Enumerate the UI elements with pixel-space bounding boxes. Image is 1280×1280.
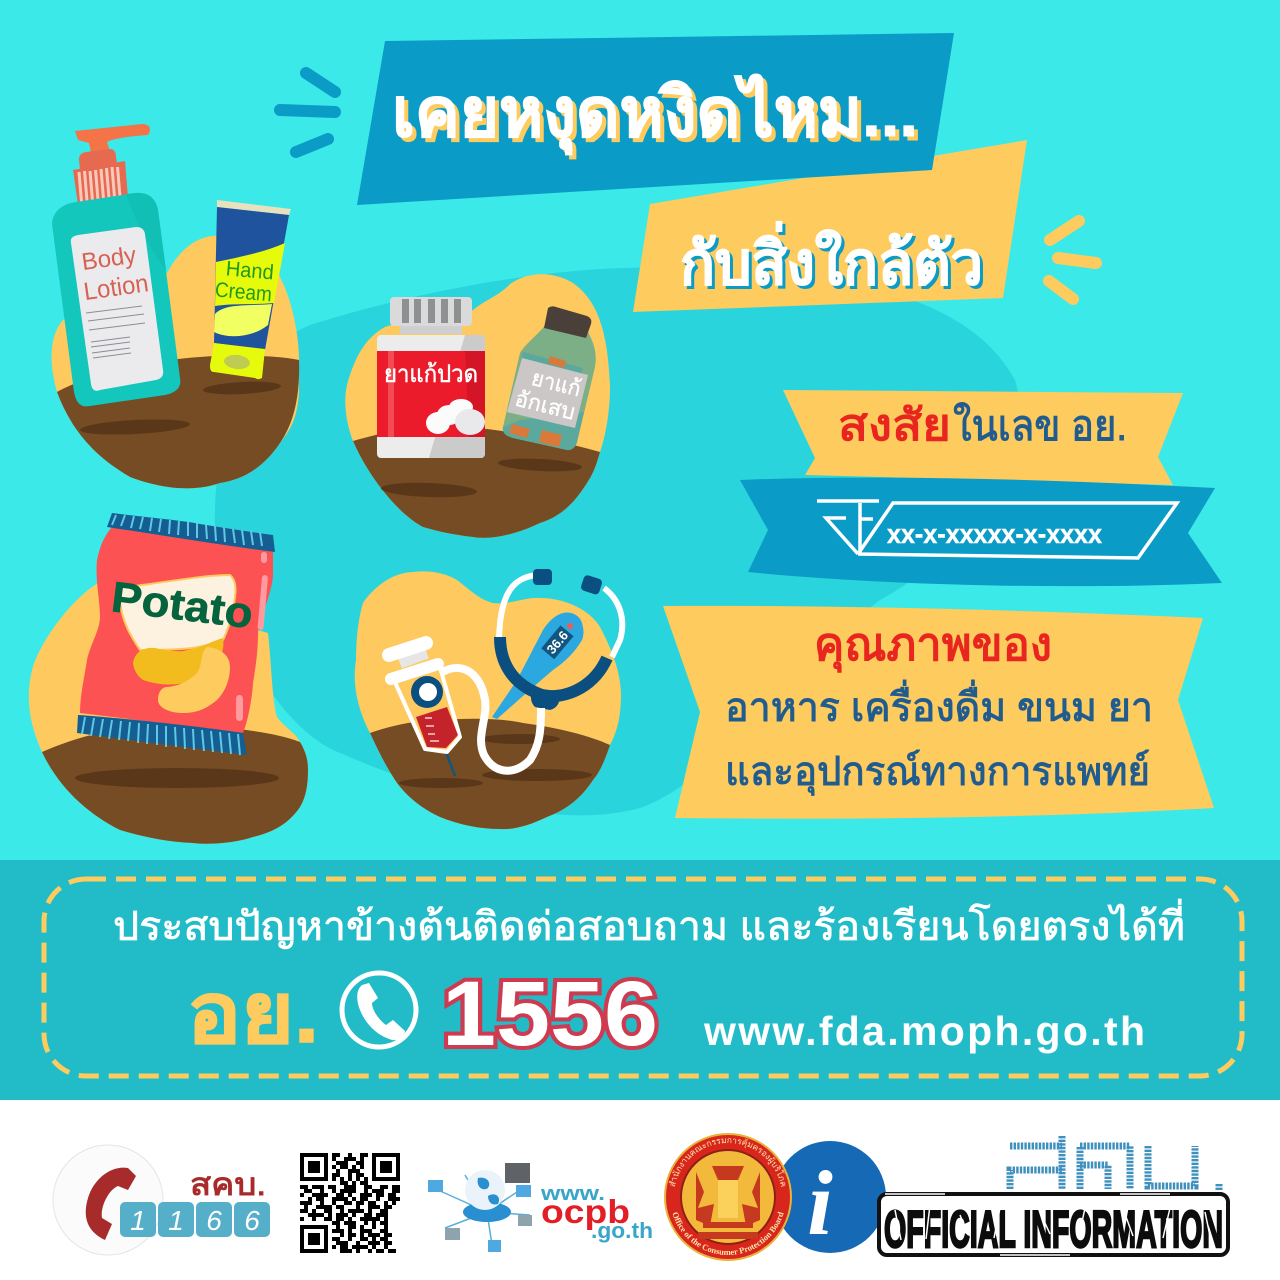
product group: potato chips — [29, 513, 308, 844]
title text: เคยหงุดหงิดไหม... — [396, 77, 922, 159]
logo: Office of the Consumer Protection Board seal — [664, 1133, 792, 1261]
icon: body lotion bottle — [52, 124, 180, 406]
logo: 1166 hotline: 1 — [168, 1205, 184, 1236]
label text: ยาแก้ปวด — [384, 361, 478, 388]
blob — [355, 571, 621, 829]
blob — [51, 235, 299, 488]
QR code — [300, 1153, 400, 1253]
FDA symbol — [817, 501, 1177, 558]
product list line 2: และอุปกรณ์ทางการแพทย์ — [725, 749, 1150, 796]
product group: medicine bottles — [345, 274, 610, 538]
logo: 1166 hotline: 1 — [130, 1205, 146, 1236]
icon: hand cream tube — [210, 200, 291, 379]
seal text: Office of the Consumer Protection Board — [672, 1212, 784, 1255]
label text: Lotion — [82, 269, 150, 306]
quality heading: คุณภาพของ — [814, 618, 1052, 673]
logo: official information stamp — [879, 1136, 1228, 1259]
contact band — [0, 860, 1280, 1100]
logo: ocpb website: .go.th — [591, 1218, 653, 1243]
ribbon: FDA number heading: ในเลข อย. — [953, 402, 1127, 449]
blob — [29, 583, 308, 844]
seal text — [668, 1138, 786, 1255]
label text — [78, 241, 150, 306]
label text: Hand — [225, 257, 275, 284]
ribbon: FDA number heading — [783, 390, 1183, 485]
logo: ocpb website: ocpb — [541, 1193, 630, 1230]
icon: green antibiotic bottle — [503, 306, 596, 450]
ribbon: FDA number format — [740, 478, 1222, 586]
label text — [214, 257, 275, 306]
logo: ocpb website — [428, 1163, 653, 1252]
logo: i information circle — [774, 1141, 886, 1254]
logo: i information circle: i — [807, 1152, 833, 1254]
ribbon: product quality — [663, 606, 1214, 819]
label text: ยาแก้ — [529, 365, 584, 401]
icon: thermometer — [492, 613, 584, 719]
label text — [513, 362, 584, 425]
icon: chips bag — [77, 513, 275, 755]
icon: syringe — [389, 643, 460, 776]
contact sentence: ประสบปัญหาข้างต้นติดต่อสอบถาม และร้องเรียนโดยตรงได้ที่ — [113, 899, 1185, 949]
label text: Cream — [214, 278, 273, 306]
FDA abbreviation: อย. — [187, 966, 319, 1060]
label text: Body — [80, 242, 138, 276]
icon: stethoscope — [438, 569, 622, 771]
text: www. — [540, 1183, 605, 1205]
icon: phone — [342, 973, 416, 1047]
website: www.fda.moph.go.th — [703, 1008, 1145, 1054]
background blob — [215, 268, 1020, 815]
dashed frame — [44, 879, 1242, 1076]
dotted heading — [1010, 1136, 1219, 1190]
subtitle panel — [633, 140, 1027, 312]
seal text: สำนักงานคณะกรรมการคุ้มครองผู้บริโภค — [668, 1138, 786, 1187]
icon: red painkiller bottle — [377, 297, 485, 458]
heading text: สงสัย — [838, 401, 951, 450]
accent dashes: yellow — [1049, 221, 1096, 299]
text: สคบ. — [190, 1167, 266, 1202]
product group: lotion and hand cream — [51, 124, 299, 488]
subtitle text: กับสิ่งใกล้ตัว — [683, 224, 986, 300]
footer — [52, 1133, 1230, 1261]
product group: medical devices — [355, 569, 622, 829]
icon: thermometer: 36.6 — [544, 628, 571, 657]
logo: 1166 hotline — [53, 1145, 270, 1255]
accent dashes: blue — [280, 73, 335, 152]
logo: 1166 hotline: 6 — [206, 1205, 222, 1236]
subtitle text: กับสิ่งใกล้ตัว — [680, 221, 983, 297]
hotline number: 1556 — [442, 963, 658, 1065]
title panel — [357, 33, 954, 205]
product list line 1: อาหาร เครื่องดื่ม ขนม ยา — [725, 680, 1153, 730]
label text: Potato — [109, 573, 256, 638]
logo: 1166 hotline: 6 — [244, 1205, 260, 1236]
label text: อักเสบ — [513, 386, 578, 425]
background — [0, 0, 1280, 860]
title text: เคยหงุดหงิดไหม... — [392, 73, 918, 155]
pills — [426, 399, 485, 435]
number format text: xx-x-xxxxx-x-xxxx — [887, 519, 1102, 549]
blob — [345, 274, 610, 538]
